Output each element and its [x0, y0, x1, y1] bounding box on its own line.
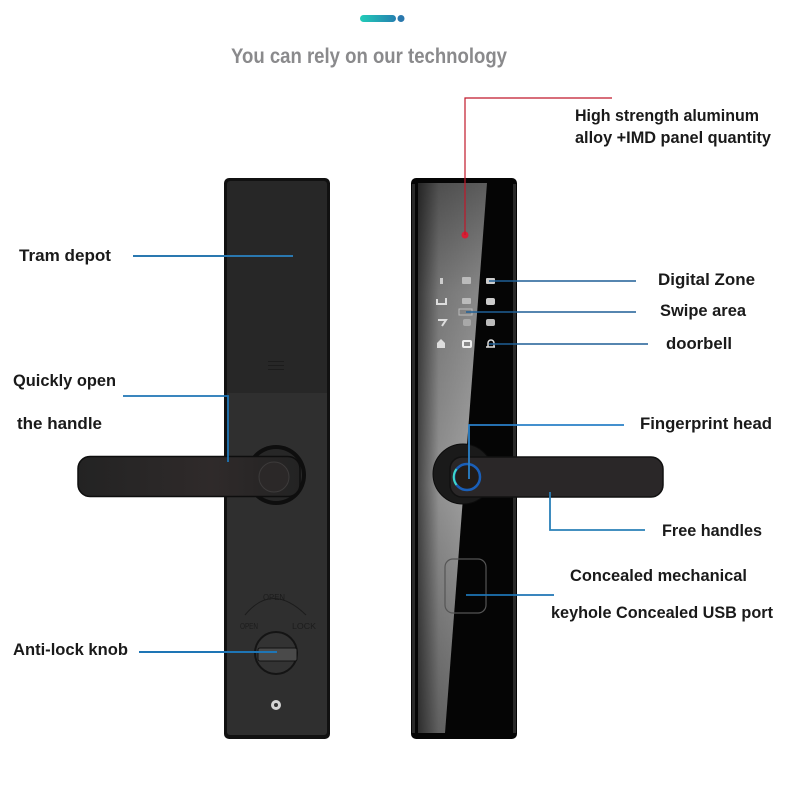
- callout: doorbell: doorbell: [666, 335, 732, 353]
- callout: fingerprint head: Fingerprint head: [640, 415, 772, 433]
- callout: free handles: [550, 492, 762, 540]
- upper housing: [227, 181, 327, 393]
- mode arc: [245, 598, 306, 615]
- handle end cap: [259, 462, 289, 492]
- side edge strips: [412, 184, 516, 733]
- lock body back plate: [224, 178, 330, 739]
- red indicator dot: [462, 232, 468, 238]
- lock body: [411, 178, 517, 739]
- callout: tram depot: Tram depot: [19, 247, 112, 265]
- right lever handle: [450, 457, 663, 497]
- panel: left lock (back view): [78, 178, 330, 739]
- left lever handle: [78, 456, 300, 496]
- knob thumb bar: [258, 648, 297, 661]
- lower plate: [227, 393, 327, 735]
- swipe area marker: [459, 309, 472, 315]
- OPEN label: OPEN: [263, 593, 285, 602]
- panel: right lock (front view): [411, 178, 663, 739]
- right knob label: LOCK: [292, 622, 317, 631]
- callout: concealed keyhole and USB: [466, 567, 773, 622]
- concealed keyhole cover: [445, 559, 486, 613]
- anti-lock knob: [255, 632, 297, 674]
- label line 2: alloy +IMD panel quantity: [575, 129, 772, 147]
- label line 2: keyhole Concealed USB port: [551, 604, 773, 622]
- callout: aluminum panel: [465, 98, 772, 235]
- callout: free handles: Free handles: [662, 522, 762, 540]
- small sensor mark: [268, 361, 284, 370]
- keypad digits: [437, 277, 495, 348]
- glass reflection: [418, 183, 487, 733]
- label line 1: High strength aluminum: [575, 107, 759, 125]
- decorative title accent: [360, 15, 404, 22]
- callout: quickly open the handle: [13, 372, 228, 462]
- left knob label: OPEN: [240, 622, 258, 631]
- handle rosette: [246, 445, 306, 505]
- label line 1: Concealed mechanical: [570, 567, 747, 585]
- label line 1: Quickly open: [13, 372, 116, 390]
- glass shade: [418, 183, 487, 733]
- callout: fingerprint head: [469, 415, 772, 479]
- screw: [271, 700, 281, 710]
- callout: swipe area: Swipe area: [660, 302, 747, 320]
- handle rosette: [433, 444, 493, 504]
- title: You can rely on our technology: [231, 45, 507, 68]
- fingerprint sensor: [454, 464, 480, 490]
- callout: anti-lock knob: Anti-lock knob: [13, 641, 128, 659]
- callout: digital zone: Digital Zone: [658, 271, 755, 289]
- label line 2: the handle: [17, 415, 102, 433]
